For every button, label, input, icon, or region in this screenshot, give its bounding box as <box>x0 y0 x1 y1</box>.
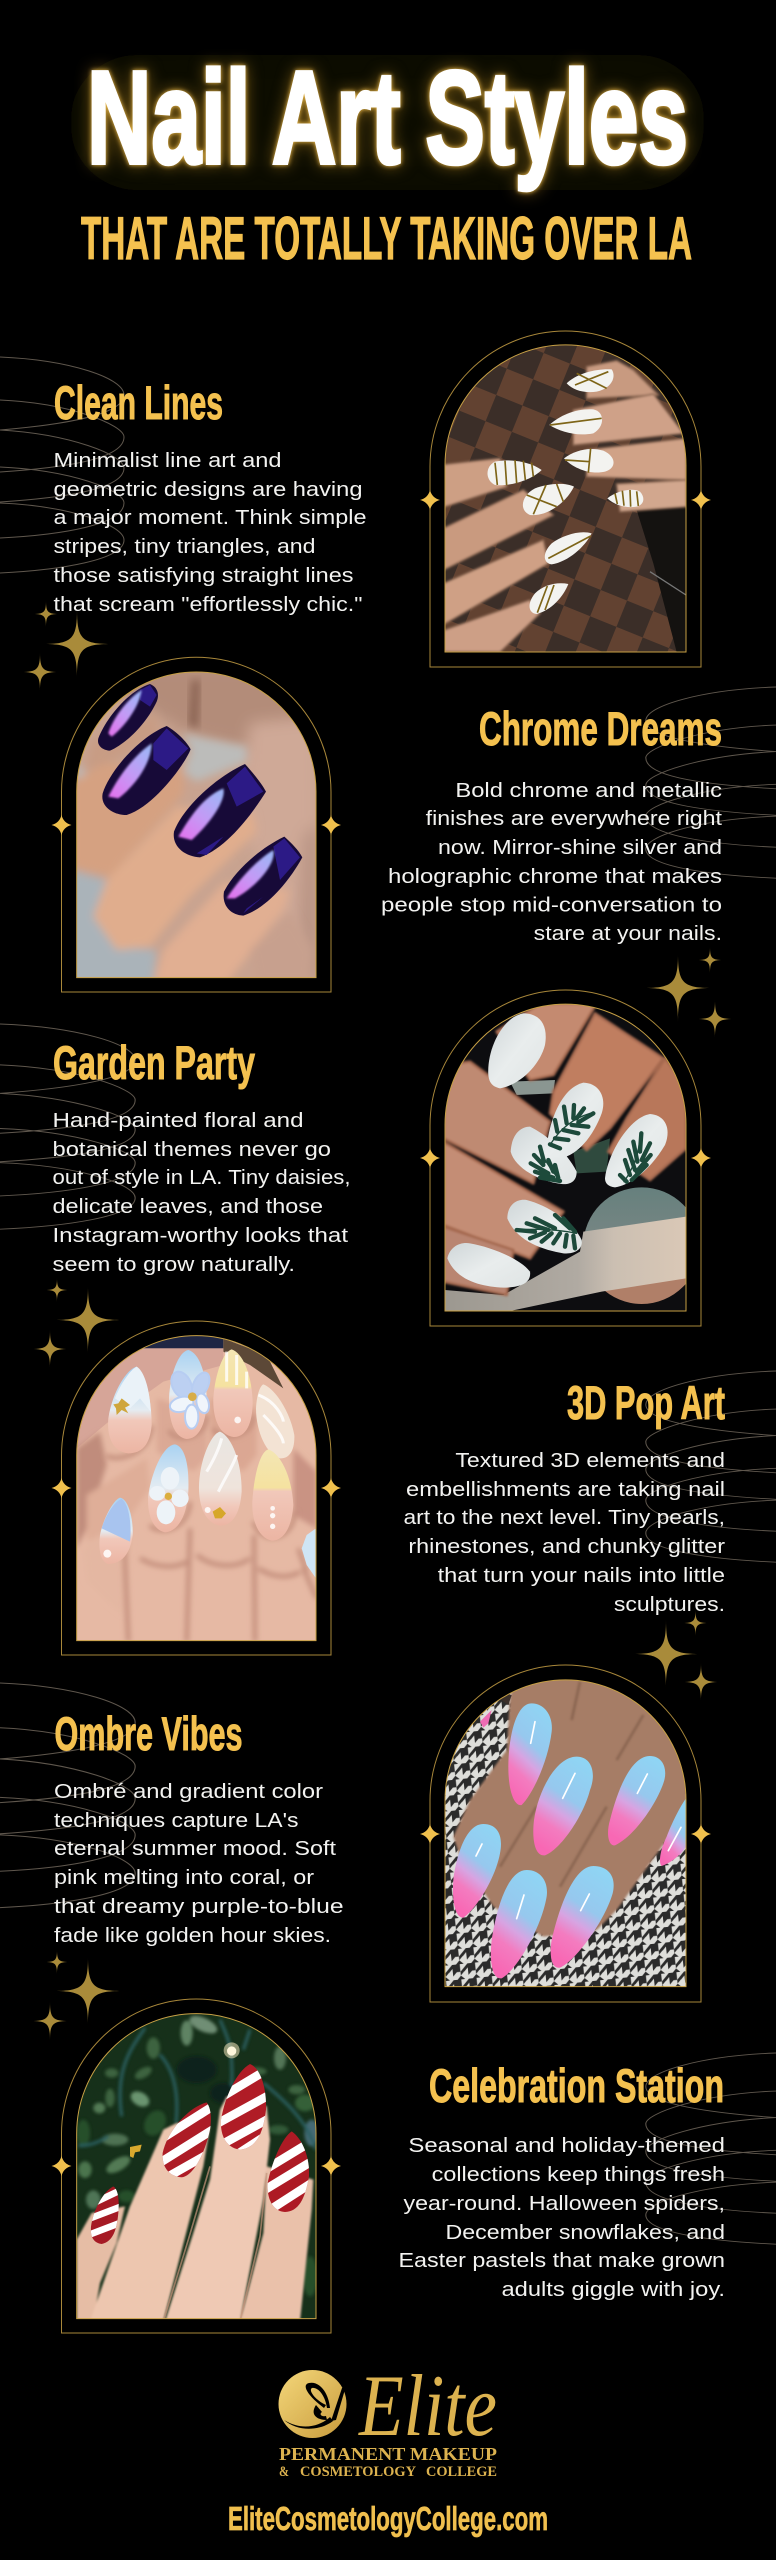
body: Chrome Dreams <box>381 780 722 945</box>
panel: Clean Lines photo arch <box>420 331 711 667</box>
decorative swirl: left 1 <box>0 357 124 573</box>
body: Ombre Vibes: fade like golden hour skies. <box>54 1925 331 1947</box>
panel: Garden Party text <box>52 1036 350 1276</box>
image: candy cane striped nails over foliage <box>77 2011 319 2321</box>
body: 3D Pop Art: sculptures. <box>614 1594 725 1616</box>
body: Garden Party: seem to grow naturally. <box>52 1254 295 1276</box>
panel: Celebration Station photo arch <box>52 1999 341 2333</box>
body: 3D Pop Art: Textured 3D elements and <box>455 1450 725 1472</box>
body: Ombre Vibes <box>54 1781 344 1947</box>
body: Garden Party: out of style in LA. Tiny daisies, <box>52 1167 350 1189</box>
body: 3D Pop Art: that turn your nails into little <box>438 1565 725 1587</box>
body: Clean Lines <box>54 450 366 616</box>
logo line: Cosmetology College: & <box>279 2464 289 2480</box>
panel: 3D Pop Art photo arch <box>52 1321 341 1655</box>
panel: Ombre Vibes text <box>54 1707 344 1947</box>
body: Chrome Dreams: holographic chrome that makes <box>388 866 722 888</box>
decorative swirl: left 2 <box>0 1024 135 1229</box>
logo wordmark: Elite: Elite <box>357 2358 497 2455</box>
sparkles: group 2 <box>644 947 734 1038</box>
panel: Chrome Dreams text <box>381 702 722 945</box>
image: pastel 3D flower and shell nails <box>77 1333 317 1642</box>
decorative swirl: right 1 <box>646 687 776 878</box>
body: Chrome Dreams: stare at your nails. <box>534 923 722 945</box>
decorative swirl: right 3 <box>646 2053 776 2244</box>
body: Clean Lines: a major moment. Think simple <box>54 507 366 529</box>
body: 3D Pop Art: rhinestones, and chunky glitter <box>408 1536 725 1558</box>
body: Celebration Station: Easter pastels that make grown <box>398 2250 725 2272</box>
logo line: Cosmetology College: COLLEGE <box>426 2464 497 2480</box>
body: Ombre Vibes: eternal summer mood. Soft <box>54 1838 337 1860</box>
body: Ombre Vibes: techniques capture LA's <box>54 1810 298 1832</box>
logo line: Permanent Makeup: PERMANENT MAKEUP <box>279 2444 497 2464</box>
body: Garden Party <box>52 1110 350 1276</box>
sparkles: group 3 <box>31 1278 122 1368</box>
sparkles: group 4 <box>632 1610 720 1701</box>
heading: Clean Lines: Clean Lines <box>54 376 223 429</box>
website url: EliteCosmetologyCollege.com <box>228 2500 548 2537</box>
heading: Ombre Vibes: Ombre Vibes <box>54 1707 242 1760</box>
body: 3D Pop Art: art to the next level. Tiny pearls, <box>404 1507 725 1529</box>
body: Chrome Dreams: now. Mirror-shine silver and <box>438 837 722 859</box>
sparkles: group 5 <box>31 1950 122 2040</box>
body: Ombre Vibes: Ombré and gradient color <box>54 1781 323 1803</box>
image: white nails with gold lines on checked bag <box>440 345 687 652</box>
sparkles: group 1 <box>21 601 111 691</box>
body: 3D Pop Art <box>404 1450 725 1616</box>
logo: Elite Permanent Makeup and Cosmetology College <box>278 2358 497 2480</box>
body: Celebration Station: collections keep things fresh <box>432 2164 725 2186</box>
flower decoration <box>167 1368 213 1429</box>
body: Clean Lines: Minimalist line art and <box>54 450 282 472</box>
body: Clean Lines: geometric designs are having <box>54 479 362 501</box>
heading: Garden Party: Garden Party <box>53 1036 255 1089</box>
body: Celebration Station: December snowflakes, and <box>446 2222 725 2244</box>
body: Garden Party: Hand-painted floral and <box>52 1110 304 1132</box>
body: 3D Pop Art: embellishments are taking nail <box>406 1479 725 1501</box>
body: Garden Party: botanical themes never go <box>52 1139 331 1161</box>
body: Garden Party: delicate leaves, and those <box>52 1196 323 1218</box>
body: Celebration Station: adults giggle with joy. <box>502 2279 725 2301</box>
body: Clean Lines: that scream "effortlessly chic." <box>54 594 362 616</box>
panel: Garden Party photo arch <box>420 990 711 1326</box>
image: purple chrome nails <box>70 663 317 983</box>
panel: Celebration Station text <box>398 2059 725 2301</box>
body: Celebration Station <box>398 2135 725 2301</box>
panel: 3D Pop Art text <box>404 1376 725 1616</box>
panel: Chrome Dreams photo arch <box>52 657 341 992</box>
body: Chrome Dreams: Bold chrome and metallic <box>455 780 722 802</box>
body: Chrome Dreams: finishes are everywhere right <box>426 808 722 830</box>
icon: butterfly medallion <box>278 2370 346 2438</box>
body: Celebration Station: year-round. Halloween spiders, <box>404 2193 725 2215</box>
body: Chrome Dreams: people stop mid-conversation to <box>381 894 722 916</box>
panel: Clean Lines text <box>54 376 366 616</box>
body: Ombre Vibes: pink melting into coral, or <box>54 1867 314 1889</box>
body: Clean Lines: stripes, tiny triangles, and <box>54 536 316 558</box>
logo line: Cosmetology College: COSMETOLOGY <box>300 2464 417 2480</box>
body: Ombre Vibes: that dreamy purple-to-blue <box>54 1896 344 1918</box>
body: Garden Party: Instagram-worthy looks that <box>52 1225 349 1247</box>
image: blue to pink ombre nails on houndstooth <box>445 1677 687 1988</box>
decorative swirl: right 2 <box>646 1371 776 1562</box>
body: Celebration Station: Seasonal and holiday-themed <box>408 2135 725 2157</box>
body: Clean Lines: those satisfying straight lines <box>54 565 354 587</box>
panel: Ombre Vibes photo arch <box>420 1665 711 2002</box>
image: white nails with green leaves <box>443 1002 700 1312</box>
decorative swirl: left 3 <box>0 1683 135 1908</box>
logo line: Cosmetology College <box>279 2464 497 2480</box>
